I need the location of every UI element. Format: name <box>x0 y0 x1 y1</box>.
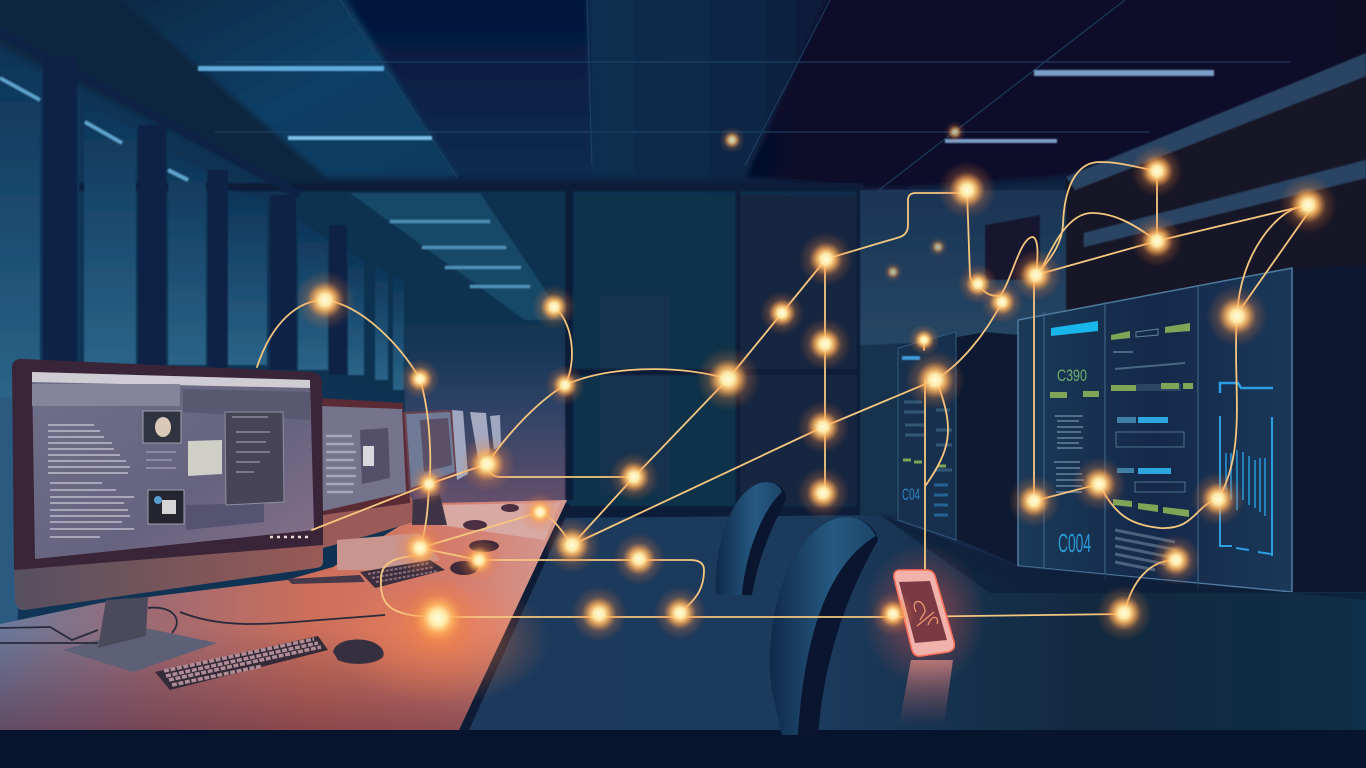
mouse: second <box>450 561 478 575</box>
network port dots <box>270 536 312 538</box>
network nodes <box>295 121 1337 658</box>
main monitor <box>12 359 323 672</box>
panel: status bar and reading: C390 <box>1057 366 1087 385</box>
desk: right dark surface <box>458 503 1366 735</box>
mouse: main <box>333 640 384 664</box>
paper stack on desk <box>337 533 440 570</box>
server rack: small display <box>898 332 1018 565</box>
desk: left red surface <box>0 500 567 732</box>
windows on the left wall <box>0 32 404 628</box>
smartphone <box>894 570 954 656</box>
chair: near <box>770 517 878 735</box>
monitor screen <box>32 372 314 559</box>
cables <box>0 608 385 643</box>
keyboard: main <box>155 636 328 690</box>
network connections <box>257 162 1308 617</box>
ceiling lights <box>198 66 1214 226</box>
keyboard: second <box>360 560 445 588</box>
label: C004 readout: C004 <box>1058 528 1091 558</box>
chairs <box>716 482 878 735</box>
corridor and glass partition <box>80 185 862 515</box>
server rack: small display: C04 <box>902 485 920 504</box>
monitor stand <box>63 597 217 672</box>
panel: bars and controls <box>1111 323 1193 570</box>
far right wall and beams <box>860 53 1366 515</box>
server display wall <box>1018 265 1366 600</box>
ceiling grid lines <box>215 0 1290 190</box>
ceiling <box>0 0 1366 190</box>
phone glow <box>862 543 986 687</box>
chart: blue bars <box>1220 383 1273 556</box>
phone reflection <box>899 660 953 725</box>
panel: status bar and reading <box>1050 321 1099 492</box>
warm reflection on desk <box>330 575 550 705</box>
desk front edge <box>0 730 1366 768</box>
chair: far <box>716 482 786 595</box>
row of far monitors <box>287 398 560 588</box>
monitor bezel <box>12 359 323 580</box>
